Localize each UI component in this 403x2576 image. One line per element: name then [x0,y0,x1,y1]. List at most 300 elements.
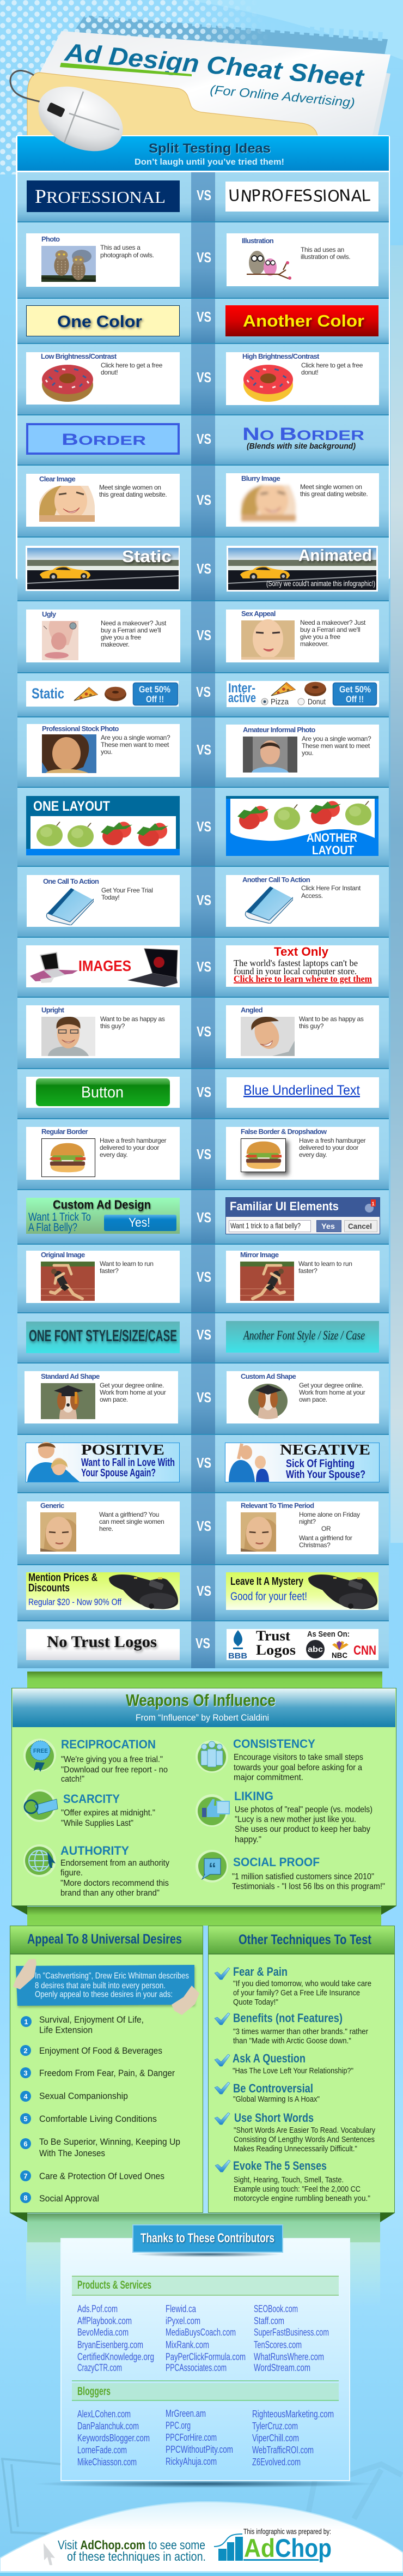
ad: negative: With Your Spouse? [286,1469,365,1481]
product links column 2 [166,2303,246,2373]
ad: one layout [26,796,180,855]
ad: another layout [226,796,378,857]
ad: ugly: Ugly [42,610,57,618]
product links column 2: PayPerClickFormula.com [166,2351,246,2362]
ad: button: Button [81,1084,124,1101]
technique: short words: "Short Words Are Easier To Read. Vocabulary [234,2126,375,2135]
product links column 3: WordStream.com [254,2362,310,2373]
blogger links column 2 [166,2408,233,2467]
desire 2: Enjoyment Of Food & Beverages [39,2046,162,2056]
product links column 3 [254,2303,329,2373]
offer button [333,683,377,705]
ad: amateur informal photo: Amateur Informal Photo [243,726,315,734]
ad: custom design: Custom Ad Design [53,1198,151,1211]
technique: short words [215,2111,375,2153]
ad: clear image: Meet single women on [99,484,161,491]
ad: border: B ORDER [62,431,146,449]
ad: one call to action: One Call To Action [43,877,99,885]
row: professional vs unprofessional [17,172,389,221]
ad: one call to action [27,875,180,927]
ad: photo: Photo [41,235,60,243]
CNN logo: CNN [353,1643,376,1658]
blonde model photo [241,619,295,660]
ad: professional: PROFESSIONAL [35,185,166,207]
scarcity: "Offer expires at midnight." [61,1808,155,1818]
donut icon [304,682,326,696]
row: static vs interactive: VS [196,684,211,700]
product links column 1: CrazyCTR.com [77,2362,122,2373]
row: button vs blue underlined text [17,1068,389,1118]
desire 6: 6 [23,2140,28,2148]
ad: custom shape: own pace. [299,1396,327,1403]
ad: negative: NEGATIVE [280,1441,370,1458]
ad: standard shape [25,1371,178,1423]
ad: images [26,945,180,987]
row: trust logos [17,1620,389,1668]
desire 1: Life Extension [39,2025,93,2035]
desire 7: Care & Protection Of Loved Ones [39,2171,164,2181]
illustration of owls [247,251,291,280]
credit line: This infographic was prepared by: [243,2527,331,2536]
ad: mention prices [26,1572,180,1610]
section heading: products and services [72,2276,339,2295]
ad: regular border: Regular Border [41,1127,88,1136]
ad: blurry image [226,473,379,527]
model photo [42,734,96,773]
ad: one layout: ONE LAYOUT [33,799,110,814]
ad: custom design: Want 1 Trick To [28,1211,91,1223]
technique: fear and pain: Quote Today!" [233,1998,278,2007]
social proof [196,1850,385,1891]
ad: static car [26,546,180,591]
ad: clear image: Clear Image [39,475,75,483]
blogger links column 2: MrGreen.am [166,2408,206,2419]
ad: custom shape: Custom Ad Shape [241,1372,296,1380]
donut dim [42,365,93,402]
social proof: "1 million satisfied customers since 2010" [232,1872,374,1881]
panel body [61,2239,350,2481]
desire 1: 1 [24,2018,28,2026]
photo of owls [41,246,96,282]
yellow car [240,566,290,581]
ad: professional stock photo: These men want to meet [101,741,169,749]
ad: static offer: Static [32,685,64,702]
ad: generic: Generic [40,1501,64,1510]
ad: relevant to time period: Want a girlfriend for [299,1534,352,1542]
row: clear vs blurry image [17,464,389,536]
product links column 2: iPyxel.com [166,2315,200,2326]
ad: trust logos [227,1628,378,1661]
ad: standard shape: Work from home at your [100,1389,166,1396]
row: calls to action: VS [197,892,211,908]
social proof: Testimonials - "I lost 56 lbs on this program!" [232,1882,385,1891]
tab heading [133,2225,283,2252]
panel: other techniques to test [208,1926,394,2212]
ad: positive [26,1441,180,1482]
reciprocation: RECIPROCATION [61,1738,156,1751]
technique: ask a question: "Has The Love Left Your Relationship?" [233,2066,353,2076]
panel frame [16,135,390,580]
ad: upright: Want to be as happy as [100,1015,165,1023]
background monitors [1,2459,402,2535]
scarcity [23,1789,155,1828]
ad: static offer [26,681,179,707]
tape [172,1986,199,2015]
ad: another call to action: Click Here For Instant [301,884,361,892]
product links column 1: BevoMedia.com [77,2327,129,2338]
row: custom ad vs familiar UI [17,1189,389,1244]
desire 6: To Be Superior, Winning, Keeping Up [39,2137,180,2147]
ad: ugly: buy a Ferrari and we'll [101,626,161,634]
blogger links column 1: MikeChiasson.com [77,2457,137,2468]
ad: no border: (Blends with site background) [247,442,356,451]
row: regular border vs false border [17,1118,389,1189]
desire 4: Sexual Companionship [39,2091,128,2101]
ad: one font style: ONE FONT STYLE/SIZE/CASE [29,1327,177,1345]
row: layouts: VS [197,818,211,835]
panel shadow [34,2480,377,2488]
product links column 1: BryanEisenberg.com [77,2339,143,2350]
desire 4: 4 [23,2092,28,2101]
ad: animated car: Animated [298,546,372,565]
blogger links column 3: Z6Evolved.com [252,2457,301,2468]
ad: mention prices: Mention Prices & [28,1572,97,1584]
row: upright vs angled: VS [197,1023,211,1040]
ad: custom shape: Get your degree online. [299,1381,363,1389]
offer button: Off !! [146,694,164,704]
abc logo: abc [308,1645,323,1654]
row: ad shapes [17,1362,389,1434]
row: mention prices vs mystery: VS [197,1583,211,1599]
ad: familiar UI elements [225,1197,380,1234]
product links column 2: Flewid.ca [166,2303,197,2314]
desire 8 [20,2192,99,2204]
ad: relevant to time period: Home alone on Friday [299,1511,360,1518]
ad: another color [225,305,378,336]
ad: mirror image: Want to learn to run [298,1260,352,1268]
ad: static car: Static [122,547,172,566]
blogger links column 3: RighteousMarketing.com [252,2409,334,2420]
squashed face photo [42,621,78,660]
title: Ad Design Cheat Sheet [63,38,365,92]
technique: benefits [215,2011,368,2046]
row: original vs mirror image [17,1244,389,1312]
row: clear vs blurry image: VS [197,492,211,508]
ad: regular border [26,1127,180,1180]
panel: appeal to 8 universal desires [10,1926,203,2212]
photo of woman [241,1512,276,1552]
desire 6 [20,2137,180,2158]
ad: illustration [227,233,378,286]
panel header: Split Testing Ideas [149,141,271,156]
liking: LIKING [234,1789,273,1803]
liking: happy." [235,1835,261,1844]
product links column 2: MediaBuysCoach.com [166,2327,236,2338]
ribbon corners [11,1906,396,1915]
technique: be controversial: "Global Warming Is A Hoax" [233,2095,320,2104]
row: mention prices vs mystery [17,1564,389,1620]
blogger links column 3: WebTrafficROI.com [252,2445,314,2456]
ad: mirror image: Mirror Image [240,1251,279,1259]
ad: high brightness: donut! [301,369,318,376]
row: photo vs illustration [17,221,389,298]
product links column 2: PPCAssociates.com [166,2362,227,2373]
row: professional vs unprofessional: VS [197,187,211,203]
technique: benefits: "3 times warmer than other brands." rather [233,2027,368,2036]
ad: low brightness: Click here to get a free [101,361,163,369]
ad: relevant to time period: Relevant To Time Period [241,1501,314,1510]
icon: three people [196,1740,228,1773]
ad: false border and dropshadow: False Border & Dropshadow [241,1127,327,1136]
ad: interactive offer: active [228,691,256,705]
radio options [261,697,326,707]
scarcity: "While Supplies Last" [61,1819,133,1828]
ad: relevant to time period: OR [321,1525,331,1533]
call to action text [58,2538,206,2563]
ad: text only: found in your local computer store. [234,966,357,976]
ad: blue underlined text [227,1077,379,1108]
panel header [209,1926,394,1954]
row: layouts [17,787,389,866]
ad: familiar UI elements: Familiar UI Elements [230,1199,339,1213]
black laptop [127,949,178,987]
row: images vs text only: VS [197,958,211,975]
ad: text only: The world's fastest laptops can't be [234,958,358,968]
radio options: Donut [308,697,326,707]
icon: free ribbon [23,1739,56,1772]
blurred photo of woman [241,482,296,521]
consistency: Encourage visitors to take small steps [234,1753,363,1762]
arguing couple [229,1444,269,1482]
section heading: products and services: Products & Services [77,2279,151,2291]
row: images vs text only [17,937,389,997]
technique: be controversial [215,2082,320,2104]
blogger links column 1: LorneFade.com [77,2445,127,2456]
ad: false border and dropshadow: Have a fresh hamburger [299,1137,366,1144]
product links column 1: AffPlaybook.com [77,2315,132,2326]
row: positive vs negative: VS [197,1455,211,1471]
blogger links column 3 [252,2409,334,2468]
consistency: towards your goal before asking for a [234,1763,362,1772]
ad: professional stock photo [27,724,180,777]
fruit row [237,801,371,830]
panel: contributors [34,2225,377,2488]
photo of woman [39,482,95,522]
ad: angled [226,1005,379,1058]
title underline [60,63,192,76]
scarcity: SCARCITY [63,1792,120,1806]
second sheet edge [370,73,390,135]
technique: be controversial: Be Controversial [233,2082,313,2095]
ad: another color: Another Color [243,311,364,330]
desire 1: Survival, Enjoyment Of Life, [39,2014,144,2025]
technique: five senses: Example using touch: "Feel the 2,000 CC [234,2185,361,2194]
dog photo [41,1383,95,1419]
ad: interactive offer: Inter- [228,681,255,696]
subtitle: (For Online Advertising) [210,82,356,110]
product links column 3: SuperFastBusiness.com [254,2327,329,2338]
mirrored runner photo [240,1262,294,1301]
desire 3: Freedom From Fear, Pain, & Danger [39,2068,175,2078]
ad: negative [225,1441,379,1482]
ad: blurry image: Meet single women on [300,483,362,491]
happy man photo [41,1017,95,1056]
tab shadow [135,2252,282,2257]
panel: weapons of influence [11,1688,396,1915]
footer dome [0,2502,403,2572]
ad: mirror image [226,1251,380,1303]
desire 6: With The Joneses [39,2148,105,2158]
desire 5: Comfortable Living Conditions [39,2114,157,2124]
row: font styles: VS [197,1326,211,1343]
row: border vs no border [17,414,389,464]
ad: high brightness [226,352,379,405]
ad: custom shape: Work from home at your [299,1389,365,1396]
panel body [12,1688,396,1906]
row: button vs blue underlined text: VS [197,1084,211,1100]
ad: another layout: ANOTHER [307,831,357,844]
fruit row [36,822,168,847]
reciprocation: catch!" [61,1775,84,1784]
panel header: Other Techniques To Test [239,1932,372,1947]
ad: photo [26,233,180,287]
ad: false border and dropshadow: delivered to your door [299,1144,358,1151]
blogger links column 2: PPC.org [166,2420,191,2431]
authority: AUTHORITY [60,1844,129,1857]
tab heading: Thanks to These Contributors [141,2231,274,2246]
ad: original image [26,1251,180,1303]
technique: short words: Consisting Of Lengthy Words And Sentences [234,2135,375,2144]
ad: original image: faster? [100,1267,119,1275]
technique: five senses [215,2159,370,2203]
ad: generic: Want a girlfriend? You [99,1511,159,1518]
ad: high brightness: Click here to get a free [301,361,363,369]
technique: five senses: motorcycle engine rumbling beneath you." [234,2194,370,2203]
product links column 2: MixRank.com [166,2339,209,2350]
ad: clear image: this great dating website. [99,491,167,498]
section heading: bloggers: Bloggers [77,2385,111,2398]
BBB logo [228,1630,247,1661]
panel header: Appeal To 8 Universal Desires [27,1932,182,1947]
desire 8: Social Approval [39,2193,99,2204]
panel header [17,136,389,171]
ad: mystery: Good for your feet! [230,1590,307,1603]
desire 5: 5 [23,2115,28,2123]
yes and cancel buttons [317,1220,377,1232]
ad: ugly [26,610,180,662]
consistency: major commitment. [234,1773,303,1782]
liking [196,1789,373,1844]
ad: false border and dropshadow [226,1127,379,1180]
ad: another call to action: Another Call To Action [242,876,310,884]
technique: benefits: Benefits (not Features) [233,2011,343,2025]
abc logo [306,1640,325,1658]
ad: professional stock photo: Are you a single woman? [101,734,170,741]
row: one color vs another color [17,298,389,343]
ad: standard shape: own pace. [100,1396,128,1403]
panel header: Weapons Of Influence [126,1691,276,1710]
social proof: SOCIAL PROOF [233,1855,320,1869]
ad: trust logos: Logos [256,1642,296,1658]
green ribbon connector [27,1672,382,1688]
pizza icon [74,687,97,701]
ad: another font style [226,1321,379,1353]
ad: illustration: Illustration [242,237,274,245]
ad: border [27,424,179,454]
blogger links column 3: ViperChill.com [252,2433,299,2444]
ad: regular border: Have a fresh hamburger [100,1137,167,1144]
consistency [196,1737,363,1782]
burger with dropshadow [241,1138,285,1172]
ad: custom design [26,1198,180,1234]
ad: no border: N O B ORDER [242,424,364,444]
footer band [0,2572,403,2576]
row: regular border vs false border: VS [197,1146,211,1162]
ad: angled: Angled [241,1006,263,1014]
black shoes [308,1574,377,1609]
radio options: Pizza [271,697,289,707]
authority: brand than any other brand" [60,1889,160,1898]
tilted man photo [241,1016,295,1056]
row: static vs animated: VS [197,560,211,577]
ad: blurry image: this great dating website. [300,490,368,498]
photo of woman [40,1512,76,1552]
desire 7: 7 [23,2172,28,2180]
row: brightness and contrast [17,343,389,414]
section heading: bloggers [72,2381,339,2400]
row: ad shapes: VS [197,1389,211,1405]
product links column 3: TenScores.com [254,2339,302,2350]
ad: mention prices: Discounts [28,1582,70,1594]
panel header [13,1688,395,1727]
technique: short words: Use Short Words [234,2111,314,2125]
ad: sex appeal: buy a Ferrari and we'll [300,626,360,634]
ad: angled: this guy? [299,1022,324,1030]
ad: amateur informal photo: These men want to meet [302,742,370,750]
authority: figure. [60,1868,83,1878]
notification globe: 1 [371,1201,375,1206]
ad: photo: This ad uses a [100,244,141,251]
technique: short words: Makes Reading Unnecessarily Difficult." [234,2144,357,2153]
ad: low brightness: donut! [101,369,118,376]
liking: Use photos of "real" people (vs. models) [235,1805,373,1814]
ad: one call to action: Get Your Free Trial [101,886,153,894]
ad: one color: One Color [57,312,142,331]
AdChop logo [214,2533,332,2562]
row: stock photo vs amateur photo [17,716,389,787]
ad: unprofessional [225,182,378,212]
row: photo vs illustration: VS [197,249,211,266]
offer button: Off !! [346,694,364,704]
row: original vs mirror image: VS [197,1269,211,1285]
tape [13,1959,36,1989]
mouse cord [10,71,41,102]
green ribbon connector 2 [27,1907,381,1926]
row: generic vs time period: VS [197,1518,211,1534]
ad: sex appeal: Need a makeover? Just [300,619,366,626]
ad: one font style [26,1322,180,1353]
icon: free ribbon: FREE [33,1748,48,1754]
burger with border [41,1138,95,1177]
header illustration: folder, sheets and mouse [0,0,403,174]
icon: speech bubble [196,1850,228,1883]
donut bright [243,365,293,402]
offer button [133,683,178,705]
band behind contributors [10,2213,395,2308]
ad: amateur informal photo: Are you a single woman? [302,735,371,743]
blogger links column 1 [77,2409,150,2468]
ad: images: IMAGES [78,957,131,974]
